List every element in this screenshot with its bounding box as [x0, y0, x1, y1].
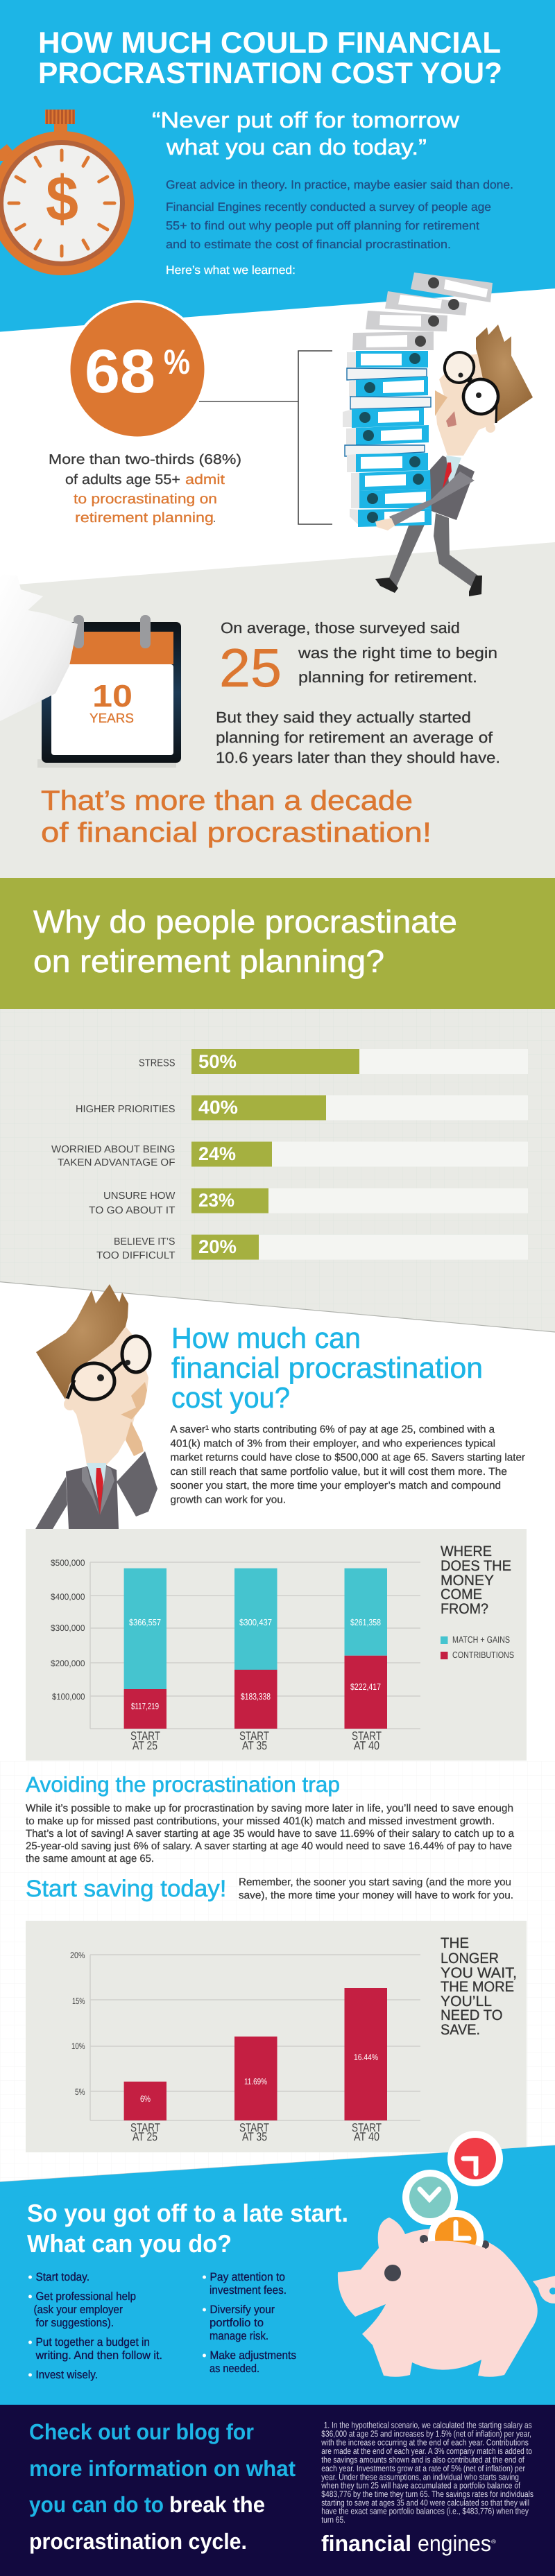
heading: so you got off to a late start: So you got off to a late start. — [27, 2199, 348, 2227]
bar: stress 50% — [139, 1049, 528, 1074]
legend — [441, 1634, 514, 1660]
body text: avoiding the trap: to make up for missed past contributions, your missed 401(k) match and missed investment growth. — [26, 1815, 495, 1827]
heading: why do people procrastinate: Why do people procrastinate — [33, 904, 457, 940]
tips list: column 2: Pay attention to — [210, 2271, 285, 2283]
bar: unsure how to go about it 23%: TO GO ABOUT IT — [89, 1205, 176, 1216]
bar: start at 25 — [124, 1568, 166, 1729]
chart title: THE MORE — [441, 1979, 514, 1995]
body text: saver scenario: sooner you start, the more time your employer’s match and compound — [171, 1480, 501, 1492]
teal coin — [402, 2170, 458, 2225]
bar: 16.44%: 16.44% — [354, 2052, 378, 2062]
bar: higher priorities 40%: HIGHER PRIORITIES — [76, 1104, 175, 1115]
chart title: MONEY — [441, 1573, 494, 1589]
callout: decade of procrastination: That’s more than a decade — [41, 786, 413, 816]
tips list: column 2: Make adjustments — [210, 2349, 296, 2362]
bar: believe it's too difficult 20%: 20% — [198, 1236, 237, 1257]
axis labels: AT 40 — [354, 1739, 379, 1752]
bar: 6%: 6% — [140, 2094, 151, 2104]
tips list: column 1: Invest wisely. — [36, 2369, 98, 2381]
bar chart: reasons for procrastinating — [51, 1049, 528, 1261]
slot lip — [424, 2241, 489, 2267]
tips list: column 1: (ask your employer — [33, 2303, 123, 2316]
chart title: WHERE — [441, 1544, 492, 1559]
bar: start at 35 — [234, 1568, 278, 1729]
calendar icon: 10 years — [37, 615, 181, 768]
calendar icon: 10 years: 10 — [92, 678, 133, 714]
text: on average: planning for retirement an average of — [216, 729, 493, 746]
bar: stress 50%: STRESS — [139, 1058, 175, 1069]
text: remember — [239, 1876, 513, 1901]
tips list: column 1: Get professional help — [36, 2290, 136, 2303]
jacket — [430, 456, 475, 520]
heading: so you got off to a late start: What can you do? — [27, 2229, 232, 2258]
icon: stopwatch with dollar sign: $ — [46, 164, 78, 234]
bar: start at 35: $300,437 — [239, 1617, 272, 1627]
tips list: column 2: as needed. — [210, 2362, 259, 2375]
body text: avoiding the trap — [26, 1803, 515, 1865]
bar: believe it's too difficult 20%: BELIEVE IT’S — [114, 1236, 175, 1247]
stat circle: 68%: 68 — [85, 336, 155, 406]
head — [436, 354, 495, 456]
panel: where does the money come from — [26, 1529, 527, 1761]
stacked bar chart: $200,000 — [51, 1659, 85, 1668]
body text: avoiding the trap: the same amount at age 65. — [26, 1853, 154, 1865]
footnote — [321, 2421, 533, 2525]
lead-in text: Here’s what we learned: — [166, 263, 296, 277]
axis labels: AT 25 — [133, 1739, 157, 1752]
bar: unsure how to go about it 23% — [89, 1188, 528, 1216]
bar: 11.69% — [234, 2037, 278, 2120]
stacked bar chart — [51, 1558, 420, 1752]
tips list: column 1: Put together a budget in — [36, 2336, 150, 2349]
call to action: check out our blog: you can do to — [29, 2492, 164, 2517]
tips list: column 1: Start today. — [36, 2271, 89, 2283]
blue band over panel edge — [0, 2145, 555, 2198]
tips list: column 2 — [203, 2271, 296, 2375]
bar: start at 40: $222,417 — [350, 1682, 381, 1692]
bar: start at 40 — [344, 1568, 387, 1729]
stat description: admit — [185, 472, 225, 487]
axis labels: START — [352, 2121, 382, 2134]
calendar icon: 10 years: YEARS — [89, 711, 134, 726]
chart title: THE — [441, 1935, 469, 1951]
stat description: More than two-thirds (68%) — [49, 452, 241, 467]
bar: unsure how to go about it 23%: UNSURE HOW — [103, 1191, 176, 1202]
pig eye — [384, 2265, 401, 2281]
heading: avoiding the procrastination trap: Avoiding the procrastination trap — [26, 1772, 340, 1797]
text: remember: save), the more time your money will have to work for you. — [239, 1890, 513, 1901]
tips list: column 1 — [28, 2271, 162, 2381]
axis labels — [130, 2121, 382, 2143]
orange coin — [428, 2210, 484, 2265]
title — [38, 26, 502, 90]
stacked bar chart: $300,000 — [51, 1623, 85, 1633]
blue binders — [343, 351, 432, 527]
call to action: check out our blog: break the — [169, 2492, 265, 2517]
stat circle: 68%: % — [164, 343, 190, 381]
bar: worried about being taken advantage of 24%: 24% — [198, 1143, 236, 1164]
bar: worried about being taken advantage of 24% — [51, 1141, 528, 1168]
body text: avoiding the trap: That’s a lot of saving! A saver starting at age 35 would have to save 11.69% of their salary to catch up to a — [26, 1828, 515, 1840]
body text: saver scenario — [171, 1424, 525, 1506]
call to action: check out our blog: Check out our blog for — [29, 2419, 254, 2444]
red coin — [447, 2131, 503, 2186]
pig tail — [533, 2276, 555, 2303]
callout: decade of procrastination — [41, 786, 432, 848]
intro text: Financial Engines recently conducted a survey of people age — [166, 200, 491, 214]
stat description: retirement planning — [75, 510, 214, 526]
bar: stress 50%: 50% — [198, 1051, 237, 1072]
bar chart: savings rate: 15% — [72, 1996, 85, 2006]
bar: unsure how to go about it 23%: 23% — [198, 1190, 234, 1211]
stat description: to procrastinating on — [74, 492, 217, 507]
tips list: column 2: manage risk. — [210, 2330, 268, 2342]
stat description: . — [213, 510, 216, 526]
illustration: man carrying binders — [343, 273, 533, 596]
chart title: LONGER — [441, 1951, 499, 1966]
heading: why do people procrastinate: on retirement planning? — [33, 943, 384, 979]
bar: worried about being taken advantage of 24%: WORRIED ABOUT BEING — [51, 1144, 175, 1155]
bar chart: savings rate — [70, 1951, 420, 2143]
text: on average — [216, 619, 500, 766]
chart title — [441, 1544, 511, 1617]
body text: avoiding the trap: 25-year-old saving just 6% of salary. A saver starting at age 40 would need to save 16.44% of pay to have — [26, 1840, 512, 1852]
bar: start at 35: $183,338 — [241, 1691, 271, 1702]
stat description: of adults age 55+ — [65, 472, 180, 487]
logo: financial engines: financial — [321, 2531, 411, 2556]
heading: start saving today: Start saving today! — [26, 1876, 226, 1902]
stacked bar chart: $400,000 — [51, 1592, 85, 1602]
axis labels: START — [130, 2121, 160, 2134]
chart title: DOES THE — [441, 1558, 511, 1574]
footnote: turn 65. — [321, 2515, 345, 2525]
chart title — [441, 1935, 517, 2038]
stacked bar chart: $500,000 — [51, 1558, 85, 1568]
tips list: column 2: investment fees. — [210, 2284, 287, 2297]
tips list: column 1: writing. And then follow it. — [35, 2349, 162, 2362]
axis labels — [130, 1729, 382, 1752]
title: HOW MUCH COULD FINANCIAL — [38, 26, 501, 60]
call to action: check out our blog: more information on what — [29, 2456, 296, 2481]
quote: what you can do today.” — [166, 135, 427, 159]
text: on average: 10.6 years later than they should have. — [216, 749, 500, 766]
bar: higher priorities 40%: 40% — [198, 1097, 238, 1118]
tips list: column 1: for suggestions). — [36, 2317, 114, 2329]
heading: how much can financial procrastination cost you: cost you? — [171, 1381, 290, 1414]
body text: saver scenario: growth can work for you. — [171, 1494, 286, 1506]
glasses — [441, 348, 478, 387]
axis labels: AT 35 — [242, 2130, 267, 2143]
legend: CONTRIBUTIONS — [452, 1650, 514, 1660]
bar: start at 25: $117,219 — [131, 1701, 159, 1711]
bar: worried about being taken advantage of 24%: TAKEN ADVANTAGE OF — [58, 1157, 176, 1168]
bracket connector — [199, 351, 332, 524]
bar: start at 40: $261,358 — [350, 1617, 381, 1627]
front leg — [434, 513, 478, 587]
heading: how much can financial procrastination cost you: How much can — [171, 1322, 361, 1354]
bar: 16.44% — [344, 1988, 387, 2120]
body text: saver scenario: can still reach that same portfolio value, but it will cost them more. The — [171, 1466, 507, 1478]
text: on average: But they said they actually started — [216, 709, 471, 726]
text: remember: Remember, the sooner you start saving (and the more you — [239, 1876, 511, 1888]
stacked bar chart: $100,000 — [52, 1692, 85, 1702]
heading: how much can financial procrastination cost you — [171, 1322, 483, 1414]
callout: decade of procrastination: of financial procrastination! — [41, 818, 432, 848]
text: on average: planning for retirement. — [298, 668, 477, 686]
heading: how much can financial procrastination cost you: financial procrastination — [171, 1351, 483, 1384]
bar: believe it's too difficult 20%: TOO DIFFICULT — [96, 1250, 176, 1261]
logo: financial engines: engines — [418, 2531, 491, 2556]
curled paper — [0, 574, 78, 721]
illustration: thinking man — [35, 1284, 157, 1529]
bar chart: savings rate: 20% — [70, 1951, 85, 1960]
call to action: check out our blog: procrastination cycle. — [29, 2529, 247, 2554]
intro text: and to estimate the cost of financial procrastination. — [166, 238, 451, 251]
text: on average: On average, those surveyed said — [221, 619, 460, 637]
text: on average: was the right time to begin — [298, 644, 497, 662]
intro text — [166, 178, 513, 251]
gray binders — [352, 273, 493, 350]
quote — [152, 107, 460, 159]
coin slot — [420, 2235, 489, 2249]
pig body — [338, 2218, 538, 2377]
tips list: column 2: portfolio to — [210, 2317, 264, 2329]
chart title: YOU WAIT, — [441, 1965, 517, 1981]
chart title: NEED TO — [441, 2007, 502, 2023]
intro text: 55+ to find out why people put off planning for retirement — [166, 219, 479, 232]
logo: financial engines: ® — [491, 2539, 496, 2545]
icon: stopwatch with dollar sign — [0, 110, 134, 275]
panel: the longer you wait — [26, 1921, 527, 2152]
body text: saver scenario: market returns could have close to $500,000 at age 65. Savers starting later — [171, 1452, 525, 1464]
axis labels: AT 35 — [242, 1739, 267, 1752]
bar: start at 25: $366,557 — [129, 1617, 161, 1627]
bar chart: savings rate: 10% — [71, 2041, 85, 2051]
axis labels: AT 25 — [133, 2130, 157, 2143]
footnote: when they turn 25 will have accumulated a portfolio balance of — [321, 2481, 520, 2491]
shoes — [375, 578, 398, 593]
axis labels: START — [239, 1729, 269, 1743]
legend: MATCH + GAINS — [452, 1634, 510, 1645]
back leg — [389, 520, 427, 587]
axis labels: START — [352, 1729, 382, 1743]
heading: why do people procrastinate — [33, 904, 457, 979]
heading: so you got off to a late start — [27, 2199, 348, 2258]
chart title: SAVE. — [441, 2022, 480, 2038]
call to action: check out our blog — [29, 2419, 296, 2554]
big number 25: 25 — [219, 637, 282, 698]
bar: believe it's too difficult 20% — [96, 1235, 528, 1261]
body text: avoiding the trap: While it’s possible to make up for procrastination by saving more later in life, you’ll need to save enough — [26, 1803, 513, 1815]
axis labels: AT 40 — [354, 2130, 379, 2143]
axis labels: START — [239, 2121, 269, 2134]
body text: saver scenario: A saver¹ who starts contributing 6% of pay at age 25, combined with a — [171, 1424, 495, 1435]
intro text: Great advice in theory. In practice, maybe easier said than done. — [166, 178, 513, 191]
stat description — [49, 452, 241, 526]
chart title: COME — [441, 1587, 482, 1602]
title: PROCRASTINATION COST YOU? — [38, 57, 502, 90]
bar: higher priorities 40% — [76, 1096, 528, 1121]
chart title: YOU’LL — [441, 1994, 492, 2009]
bar: 6% — [124, 2082, 166, 2120]
stat circle: 68% — [68, 300, 207, 439]
chart title: FROM? — [441, 1601, 488, 1617]
illustration: piggy bank with clock coins — [338, 2131, 555, 2377]
axis labels: START — [130, 1729, 160, 1743]
bar: 11.69%: 11.69% — [244, 2077, 267, 2086]
tips list: column 2: Diversify your — [210, 2303, 275, 2316]
body text: saver scenario: 401(k) match of 3% from their employer, and who experiences typical — [171, 1438, 495, 1450]
bar chart: savings rate: 5% — [75, 2087, 85, 2097]
logo: financial engines — [321, 2531, 496, 2556]
quote: “Never put off for tomorrow — [152, 107, 460, 132]
